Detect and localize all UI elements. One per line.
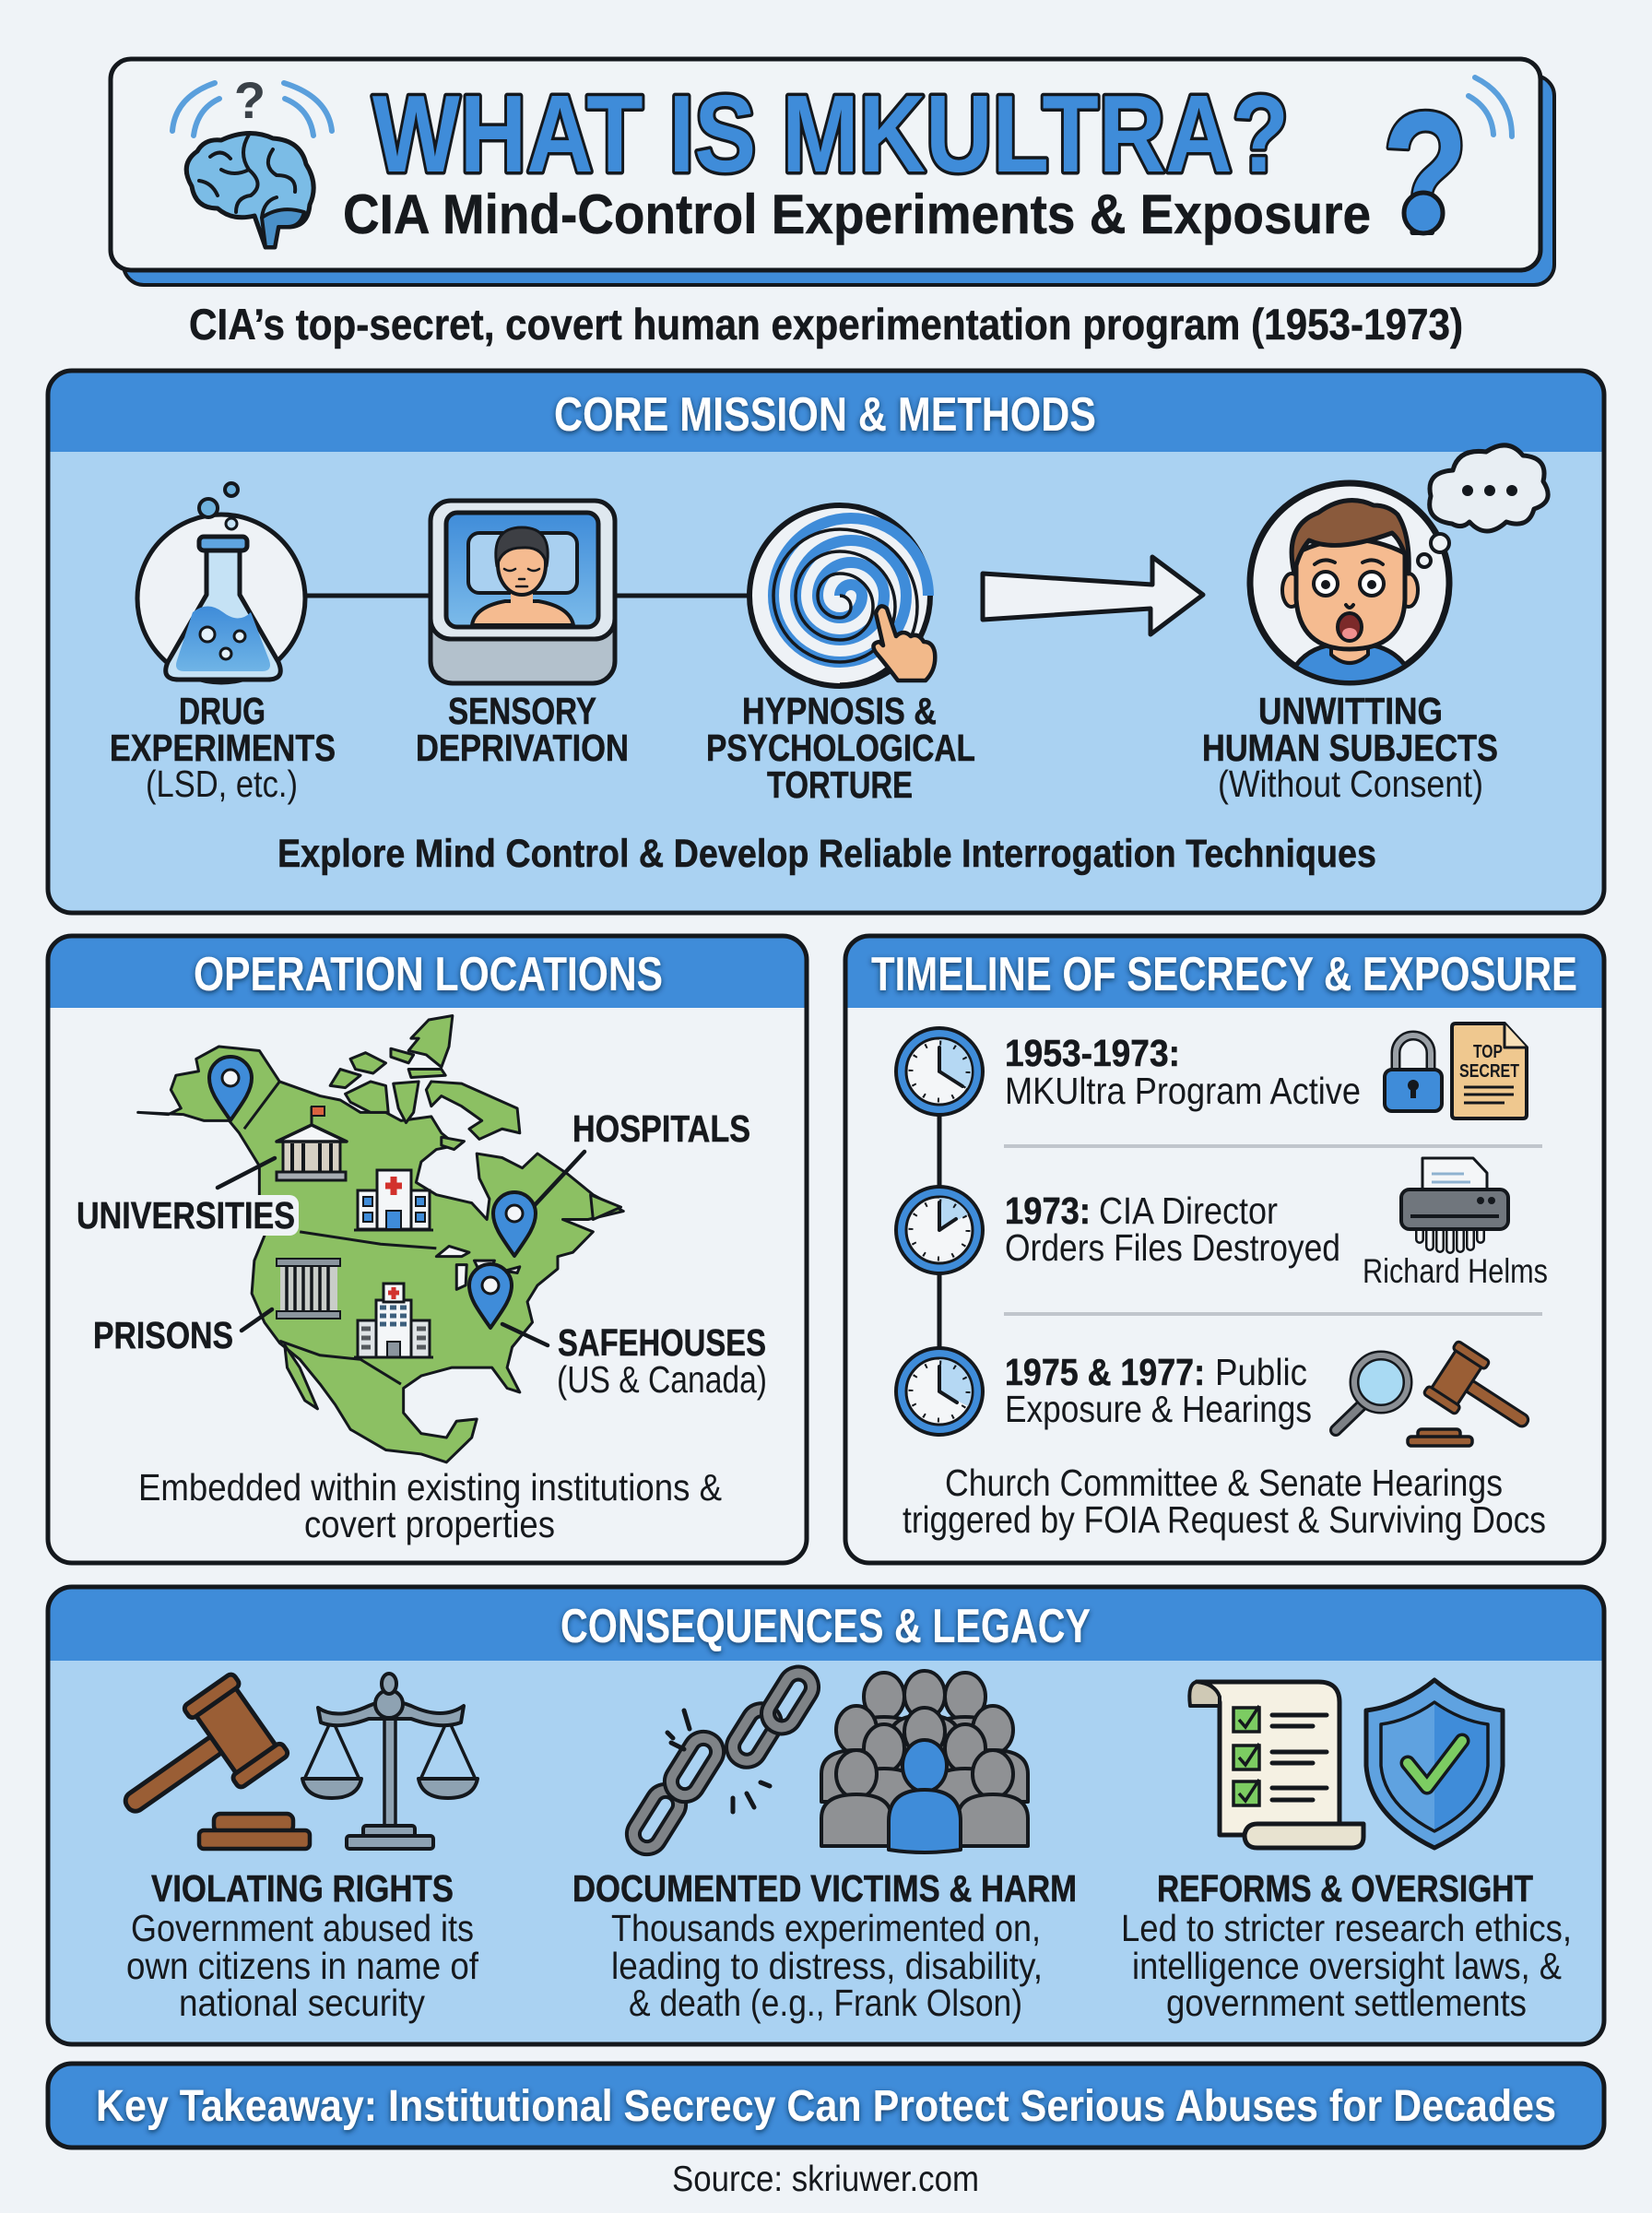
dividers — [1004, 1146, 1542, 1314]
caption: Embedded within existing institutions & — [138, 1466, 722, 1509]
mission statement: Explore Mind Control & Develop Reliable Interrogation Techniques — [277, 832, 1376, 876]
icon: scales of justice — [302, 1674, 478, 1849]
label: sensory deprivation — [416, 690, 629, 769]
icon: university — [277, 1106, 347, 1180]
column: reforms and oversight: intelligence oversight laws, & — [1132, 1945, 1562, 1987]
summary: triggered by FOIA Request & Surviving Docs — [903, 1498, 1546, 1541]
connector line — [304, 594, 751, 598]
icon: clinic building — [354, 1284, 433, 1357]
label: hospitals: HOSPITALS — [572, 1107, 750, 1150]
arrow — [983, 557, 1203, 634]
text: 1953-1973 — [1005, 1032, 1361, 1112]
column: violating rights: own citizens in name of — [126, 1945, 479, 1987]
label: hypnosis and psychological torture: HYPNOSIS & — [742, 690, 937, 732]
column: documented victims — [572, 1867, 1077, 2024]
text: 1975 and 1977: 1975 & 1977: — [1005, 1351, 1205, 1393]
text: 1973: Orders Files Destroyed — [1005, 1226, 1340, 1269]
label: unwitting human subjects: UNWITTING — [1258, 690, 1443, 732]
column: reforms and oversight: Led to stricter research ethics, — [1121, 1907, 1572, 1949]
heading: CORE MISSION & METHODS — [554, 388, 1096, 442]
column: violating rights — [126, 1867, 479, 2024]
label: unwitting human subjects: HUMAN SUBJECTS — [1202, 727, 1498, 769]
panel: consequences and legacy — [48, 1587, 1604, 2044]
icon: clock 3 — [896, 1348, 983, 1435]
text: 1973: CIA Director — [1099, 1189, 1278, 1232]
map of North America — [138, 1016, 623, 1462]
map pins — [209, 1057, 536, 1328]
label: safehouses — [557, 1321, 767, 1401]
label: safehouses: (US & Canada) — [557, 1358, 767, 1401]
subtitle: CIA Mind-Control Experiments & Exposure — [343, 183, 1371, 245]
icon: top secret document: TOP — [1473, 1042, 1503, 1062]
label: unwitting human subjects: (Without Consent) — [1218, 763, 1483, 805]
label: universities: UNIVERSITIES — [77, 1194, 295, 1237]
column: reforms and oversight: REFORMS & OVERSIGHT — [1157, 1867, 1533, 1910]
column: documented victims: DOCUMENTED VICTIMS & HARM — [572, 1867, 1077, 1910]
column: reforms and oversight — [1121, 1867, 1572, 2024]
caption: covert properties — [304, 1503, 555, 1545]
tagline: CIA’s top-secret, covert human experimentation program (1953-1973) — [189, 300, 1463, 349]
text: 1975 and 1977: Exposure & Hearings — [1005, 1388, 1312, 1430]
column: violating rights: VIOLATING RIGHTS — [151, 1867, 454, 1910]
label: unwitting human subjects — [1202, 690, 1498, 805]
label: drug experiments: DRUG — [179, 690, 266, 732]
title banner — [111, 59, 1554, 285]
icon: shield with check — [1366, 1680, 1503, 1848]
label: sensory deprivation: DEPRIVATION — [416, 727, 629, 769]
heading: OPERATION LOCATIONS — [194, 948, 663, 1001]
icon: checklist scroll — [1189, 1682, 1363, 1848]
column: reforms and oversight: government settlements — [1166, 1982, 1527, 2024]
column: documented victims: leading to distress, disability, — [611, 1945, 1043, 1987]
label: safehouses: SAFEHOUSES — [558, 1321, 766, 1364]
icon: hospital — [354, 1170, 433, 1230]
panel: timeline — [845, 936, 1604, 1563]
column: violating rights: Government abused its — [131, 1907, 474, 1949]
main title: WHAT IS MKULTRA? — [372, 73, 1289, 195]
label: Richard Helms: Richard Helms — [1363, 1252, 1548, 1290]
icon: clock 1 — [896, 1028, 983, 1115]
icon: clock 2 — [896, 1187, 983, 1273]
source line: Source: skriuwer.com — [672, 2160, 979, 2199]
text: 1953-1973: MKUltra Program Active — [1005, 1070, 1361, 1112]
text: 1953-1973: 1953-1973: — [1005, 1032, 1180, 1074]
key takeaway banner — [48, 2064, 1604, 2148]
label: drug experiments: EXPERIMENTS — [110, 727, 336, 769]
icon: gavel small — [1408, 1341, 1544, 1450]
label: sensory deprivation: SENSORY — [448, 690, 596, 732]
caption — [138, 1466, 722, 1545]
label: prisons: PRISONS — [93, 1314, 233, 1356]
label: hypnosis and psychological torture — [706, 690, 975, 806]
icon: paper shredder — [1401, 1158, 1508, 1249]
label: hypnosis and psychological torture: PSYCHOLOGICAL — [706, 727, 975, 769]
icon: top secret document — [1452, 1024, 1527, 1118]
panel: core mission and methods — [48, 371, 1604, 913]
column: documented victims: & death (e.g., Frank Olson) — [629, 1982, 1022, 2024]
heading: CONSEQUENCES & LEGACY — [560, 1600, 1091, 1653]
icon: top secret document: SECRET — [1459, 1061, 1519, 1082]
text: 1975 and 1977 — [1005, 1351, 1312, 1430]
icon: prison — [277, 1259, 340, 1319]
icon: thought bubble — [1418, 445, 1548, 567]
timeline spine — [937, 1071, 942, 1391]
leader lines — [218, 1152, 584, 1345]
label: drug experiments — [110, 690, 336, 805]
summary — [903, 1462, 1546, 1541]
icon: brain with signal waves: ? — [234, 71, 266, 129]
icon: crowd of victims — [821, 1671, 1028, 1852]
icon: flask — [137, 483, 305, 682]
icon: sensory deprivation tank — [431, 501, 615, 683]
panel: operation locations — [48, 936, 807, 1563]
icon: unwitting subject — [1250, 483, 1449, 687]
icon: question mark with waves — [1382, 76, 1512, 269]
label: drug experiments: (LSD, etc.) — [146, 763, 298, 805]
text: 1975 and 1977: Public — [1215, 1351, 1307, 1393]
icon: broken chain — [628, 1668, 818, 1853]
summary: Church Committee & Senate Hearings — [945, 1462, 1503, 1504]
icon: hypnosis spiral with hand — [749, 505, 935, 686]
text: 1973 — [1005, 1189, 1340, 1269]
icon: magnifying glass — [1336, 1355, 1408, 1430]
text: 1973: 1973: — [1005, 1189, 1091, 1232]
icon: question mark with waves: ? — [1382, 76, 1469, 269]
icon: brain with signal waves — [172, 71, 332, 247]
label: hypnosis and psychological torture: TORTURE — [767, 763, 913, 806]
icon: padlock — [1385, 1035, 1442, 1111]
icon: gavel — [99, 1673, 310, 1849]
column: violating rights: national security — [179, 1982, 425, 2024]
column: documented victims: Thousands experimented on, — [611, 1907, 1041, 1949]
